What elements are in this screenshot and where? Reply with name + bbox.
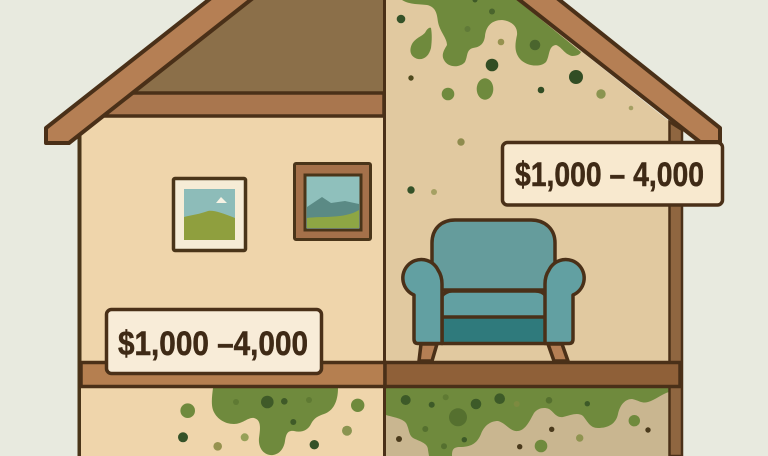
right wall post — [670, 122, 682, 456]
left roof rafter — [46, 0, 253, 143]
panel: lower left room with mold — [81, 388, 384, 456]
panel: clean attic — [135, 0, 384, 92]
mold: upper right wall — [397, 0, 633, 195]
panel: clean left wall — [79, 110, 385, 456]
cost label: left — [106, 310, 322, 374]
cost label: right — [502, 142, 722, 205]
cost label: left: $1,000 –4,000 — [118, 325, 308, 363]
picture: white-matted landscape — [174, 178, 246, 250]
right floor beam — [385, 362, 680, 386]
armchair — [403, 220, 584, 361]
panel: lower right room with mold — [386, 388, 670, 456]
attic beam — [102, 93, 384, 116]
picture: brown-framed mountain landscape — [294, 164, 370, 240]
panel: moldy right wall — [385, 0, 670, 456]
cost label: right: $1,000 – 4,000 — [515, 156, 704, 194]
right roof rafter — [517, 0, 720, 142]
center dividing line — [383, 0, 386, 456]
left floor beam — [81, 362, 385, 386]
